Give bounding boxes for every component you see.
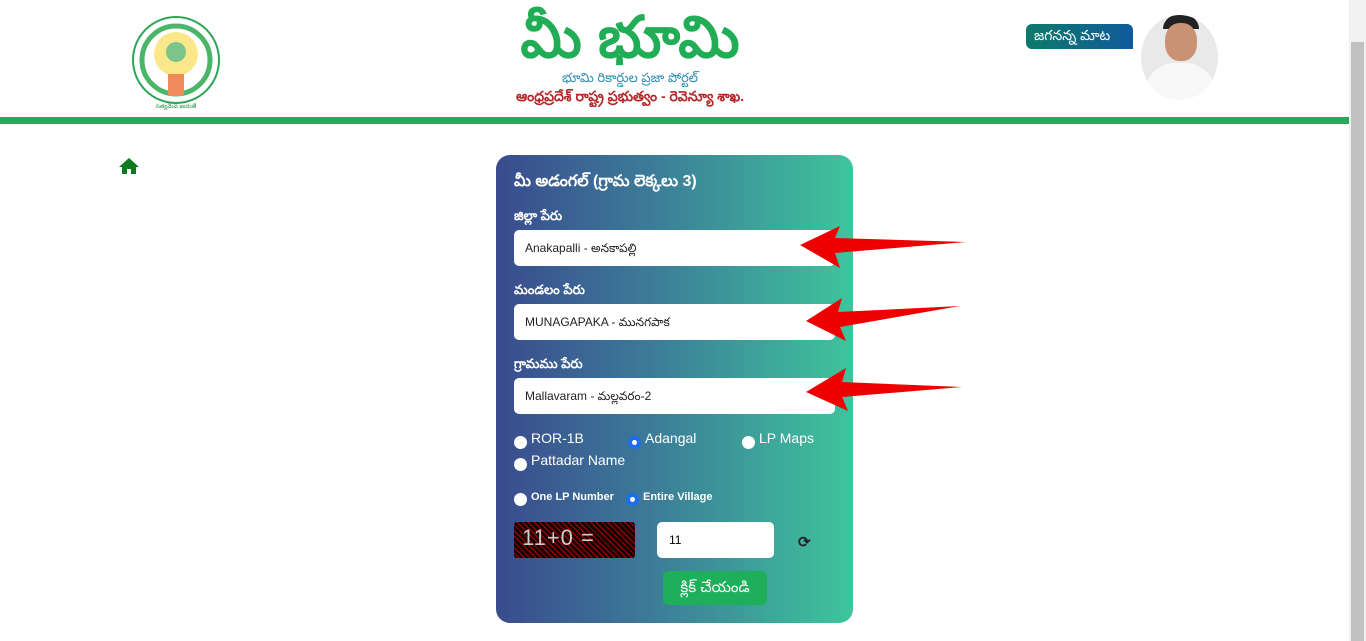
title bbox=[516, 5, 744, 108]
label: mandal: మండలం పేరు bbox=[514, 282, 585, 297]
arrow 1 bbox=[800, 226, 966, 268]
captcha input: 11 bbox=[669, 533, 681, 547]
logo: state emblem: సత్యమేవ జయతే bbox=[156, 103, 197, 110]
radio options: Entire Village bbox=[643, 491, 712, 503]
radio options: Pattadar Name bbox=[531, 452, 625, 468]
captcha input bbox=[657, 522, 774, 558]
select: village: ⌄ bbox=[814, 388, 823, 400]
label: village: గ్రామము పేరు bbox=[514, 356, 583, 371]
label: district: జిల్లా పేరు bbox=[514, 208, 562, 223]
title: భూమి రికార్డుల ప్రజా పోర్టల్ bbox=[562, 70, 698, 85]
radio options: ROR-1B bbox=[531, 430, 584, 446]
input: mandal bbox=[514, 304, 835, 340]
radio options bbox=[514, 430, 814, 506]
radio options: One LP Number bbox=[531, 491, 614, 503]
select: village: Mallavaram - మల్లవరం-2 bbox=[525, 389, 651, 403]
arrow 3 bbox=[806, 368, 962, 411]
title: ఆంధ్రప్రదేశ్ రాష్ట్ర ప్రభుత్వం - రెవెన్యూ శాఖ. bbox=[516, 88, 744, 104]
submit button: క్లిక్ చేయండి bbox=[680, 579, 750, 596]
title: మీ భూమి bbox=[520, 5, 740, 70]
input: district: Anakapalli - అనకాపల్లి bbox=[525, 241, 636, 255]
input: district bbox=[514, 230, 835, 266]
icon: home bbox=[119, 158, 139, 174]
radio options: Adangal bbox=[645, 430, 696, 446]
icon: refresh: ⟳ bbox=[798, 534, 811, 551]
select: village bbox=[514, 378, 835, 414]
input: mandal: MUNAGAPAKA - మునగపాక bbox=[525, 315, 670, 329]
radio options: LP Maps bbox=[759, 430, 814, 446]
captcha image bbox=[514, 522, 635, 558]
submit button bbox=[663, 571, 767, 605]
logo: state emblem bbox=[132, 16, 220, 110]
badge: jagananna maata: జగనన్న మాట bbox=[1034, 27, 1110, 43]
photo bbox=[1141, 15, 1218, 100]
green divider bar bbox=[0, 117, 1349, 124]
captcha image: 11+0 = bbox=[522, 525, 595, 550]
panel: adangal form bbox=[496, 155, 853, 623]
scrollbar bbox=[1349, 0, 1366, 641]
badge: jagananna maata bbox=[1026, 24, 1133, 49]
form title: మీ అడంగల్ (గ్రామ లెక్కలు 3) bbox=[514, 173, 697, 190]
arrow 2 bbox=[806, 298, 960, 341]
